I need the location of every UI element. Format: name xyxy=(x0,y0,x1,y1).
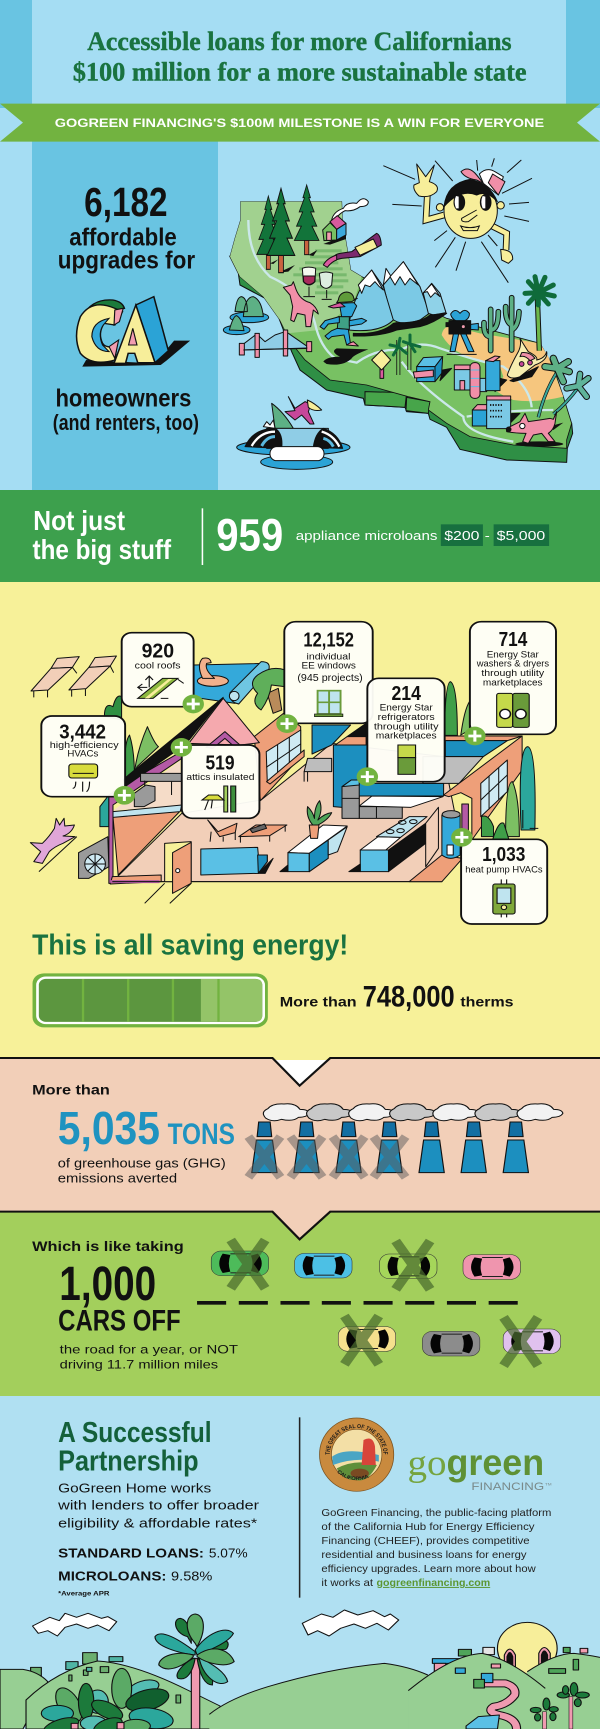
icon: cacti xyxy=(484,298,519,351)
illustration: California map xyxy=(223,158,588,469)
icon: storefront xyxy=(413,357,452,382)
roads xyxy=(248,220,553,442)
heading: the big stuff xyxy=(33,535,172,566)
icon: pink horse xyxy=(283,282,318,327)
stat: 959 appliance microloans: 959 xyxy=(216,511,283,561)
text: about GoGreen: gogreenfinancing.com xyxy=(377,1578,490,1589)
panel: greenhouse gas averted xyxy=(0,1058,600,1213)
text: about GoGreen: Financing (CHEEF), provides competitive xyxy=(321,1536,530,1547)
small palms xyxy=(530,1683,589,1729)
winding road xyxy=(484,1683,517,1729)
card: cool roofs xyxy=(122,633,194,707)
progress bar xyxy=(33,973,268,1027)
left palms xyxy=(41,1668,175,1729)
icon: pool with inflatable xyxy=(194,658,269,704)
icon row: cars xyxy=(211,1240,561,1366)
mountains xyxy=(348,262,447,336)
icon: road sign and small palms xyxy=(372,335,420,378)
icon: state seal: THE GREAT SEAL OF THE STATE OF xyxy=(325,1424,388,1454)
card: high-efficiency HVACs: 3,442 xyxy=(59,720,106,743)
icon: film camera xyxy=(446,310,478,354)
text: about GoGreen: of the California Hub for Energy Efficiency xyxy=(321,1522,535,1533)
heading xyxy=(58,1416,212,1477)
stat: 6,182 affordable upgrades: homeowners xyxy=(55,384,191,412)
title: Accessible loans for more Californians xyxy=(87,28,512,57)
text: 5,035 tons: 5,035 xyxy=(58,1102,160,1154)
stat: 6,182 affordable upgrades xyxy=(53,180,199,436)
card: EE windows: 12,152 xyxy=(303,628,354,651)
icon: surfer and wave xyxy=(237,397,350,469)
stat: 748,000 therms: therms xyxy=(460,995,514,1010)
illustration: hills and palms xyxy=(0,1610,600,1729)
text: 5,035 tons: TONS xyxy=(168,1117,235,1151)
illustration: house cutaway xyxy=(30,656,538,903)
stat: 748,000 therms xyxy=(280,980,514,1013)
text: 1,000 cars off: Which is like taking xyxy=(32,1239,184,1255)
card: refrigerators: through utility xyxy=(374,722,439,732)
card: refrigerators: marketplaces xyxy=(376,731,437,741)
plus markers xyxy=(114,695,486,847)
text: lender description: eligibility & affordable rates* xyxy=(58,1516,258,1531)
stat: 959 appliance microloans: - xyxy=(485,528,490,543)
icon: beach palms xyxy=(538,358,588,417)
icon: clouds xyxy=(33,1610,399,1636)
heading xyxy=(33,506,203,566)
islands xyxy=(223,297,269,335)
stat: 959 appliance microloans: $200 xyxy=(444,528,480,543)
text: lender description: GoGreen Home works xyxy=(58,1481,211,1496)
logo: GoGreen Financing: FINANCING xyxy=(471,1480,544,1493)
card: EE windows: individual xyxy=(307,652,351,662)
big palm xyxy=(155,1614,234,1729)
icon: pink bear xyxy=(506,412,563,447)
card: refrigerators: Energy Star xyxy=(380,703,434,713)
card: washers and dryers: 714 xyxy=(499,627,528,651)
text: 5,035 tons: emissions averted xyxy=(58,1172,177,1185)
text: about GoGreen xyxy=(321,1508,551,1589)
panel: cars off the road xyxy=(0,1212,600,1396)
ribbon banner: GOGREEN FINANCING'S $100M MILESTONE IS A WIN FOR EVERYONE xyxy=(55,116,544,130)
card: high-efficiency HVACs: high-efficiency xyxy=(50,741,119,751)
text: 1,000 cars off: CARS OFF xyxy=(58,1304,181,1337)
logo: GoGreen Financing xyxy=(408,1442,552,1493)
icon: CA block letters xyxy=(77,297,190,367)
stat: 959 appliance microloans: appliance microloans xyxy=(296,528,437,543)
icon: water heater xyxy=(442,811,460,858)
text: loan rates: 5.07% xyxy=(209,1547,248,1561)
shadows xyxy=(270,235,346,273)
icon: trees xyxy=(100,668,469,827)
text: about GoGreen: GoGreen Financing, the public-facing platform xyxy=(321,1508,551,1519)
heading: Partnership xyxy=(58,1445,199,1477)
stat: 6,182 affordable upgrades: upgrades for xyxy=(58,246,195,274)
icon: state seal xyxy=(319,1418,394,1492)
text: 1,000 cars off xyxy=(32,1239,238,1371)
vineyard rows xyxy=(293,249,348,294)
card: high-efficiency HVACs: HVACs xyxy=(67,749,98,759)
icon: tall palm xyxy=(525,277,554,351)
text: lender description xyxy=(57,1481,259,1531)
icon: city buildings xyxy=(454,356,520,429)
ribbon banner xyxy=(0,104,600,142)
logo: GoGreen Financing: green xyxy=(447,1442,544,1483)
icon: wine bottle and glasses xyxy=(302,233,381,299)
card: refrigerators: 214 xyxy=(391,681,421,705)
text: 1,000 cars off: 1,000 xyxy=(59,1257,156,1311)
card: high-efficiency HVACs xyxy=(41,716,125,797)
title: $100 million for a more sustainable state xyxy=(73,58,527,87)
card: washers and dryers: Energy Star xyxy=(487,650,540,660)
card: heat pump HVACs: heat pump HVACs xyxy=(465,865,543,875)
text: about GoGreen: efficiency upgrades. Learn more about how xyxy=(321,1564,536,1575)
stat: 959 appliance microloans: $5,000 xyxy=(497,528,546,543)
text: loan rates xyxy=(58,1547,248,1598)
card: heat pump HVACs xyxy=(461,839,547,924)
stat: 959 appliance microloans xyxy=(216,511,549,561)
card: attics insulated: 519 xyxy=(205,751,235,774)
panel: home upgrades and energy saved xyxy=(0,582,600,1060)
icon: loungers xyxy=(31,656,116,697)
text: 5,035 tons: More than xyxy=(32,1082,110,1098)
text: 1,000 cars off: driving 11.7 million miles xyxy=(60,1358,219,1371)
text: loan rates: *Average APR xyxy=(58,1590,110,1598)
text: loan rates: STANDARD LOANS: xyxy=(58,1547,204,1561)
title xyxy=(73,28,527,87)
text: about GoGreen: it works at xyxy=(321,1578,373,1589)
text: about GoGreen: residential and business loans for energy xyxy=(321,1550,527,1561)
card: washers and dryers xyxy=(470,622,556,734)
text: lender description: with lenders to offer broader xyxy=(57,1499,259,1513)
card: EE windows: EE windows xyxy=(302,661,356,671)
card: EE windows: (945 projects) xyxy=(297,674,363,684)
panel: header and state map xyxy=(0,0,600,492)
text: loan rates: 9.58% xyxy=(171,1569,213,1584)
card: attics insulated xyxy=(182,745,259,818)
heading: A Successful xyxy=(58,1416,212,1449)
logo: GoGreen Financing: TM xyxy=(545,1482,552,1486)
text: 1,000 cars off: the road for a year, or NOT xyxy=(60,1342,238,1356)
icon: cabin with smoke xyxy=(323,199,368,241)
stat: 748,000 therms: More than xyxy=(280,995,357,1010)
stat: 748,000 therms: 748,000 xyxy=(363,980,455,1013)
card: refrigerators xyxy=(367,678,445,782)
icon: jumping dog xyxy=(30,818,77,872)
card: attics insulated: attics insulated xyxy=(186,773,254,783)
icon: door xyxy=(145,842,191,903)
logo: GoGreen Financing: go xyxy=(408,1442,447,1483)
card: EE windows xyxy=(284,622,373,723)
text: loan rates: MICROLOANS: xyxy=(58,1569,166,1584)
card: washers and dryers: marketplaces xyxy=(483,678,543,688)
heading: this is all saving energy: This is all saving energy! xyxy=(32,928,348,961)
card: cool roofs: cool roofs xyxy=(135,661,181,671)
card: cool roofs: 920 xyxy=(142,639,174,662)
card: heat pump HVACs: 1,033 xyxy=(482,842,525,866)
card: washers and dryers: washers & dryers xyxy=(476,659,549,669)
road divider xyxy=(197,1301,518,1305)
roof xyxy=(123,697,259,807)
houses on hills xyxy=(69,1659,579,1703)
stat: 6,182 affordable upgrades: (and renters, too) xyxy=(53,411,199,436)
icon row: smokestacks xyxy=(248,1104,563,1177)
icon: outdoor HVAC unit xyxy=(79,837,109,878)
heading: Not just xyxy=(33,506,125,537)
text: 5,035 tons: of greenhouse gas (GHG) xyxy=(58,1156,226,1170)
stat: 6,182 affordable upgrades: 6,182 xyxy=(84,180,168,225)
card: washers and dryers: through utility xyxy=(481,669,544,679)
floor and walls xyxy=(109,713,538,884)
icon: kitchen xyxy=(280,780,443,872)
stat: 6,182 affordable upgrades: affordable xyxy=(69,223,177,251)
panel: a successful partnership xyxy=(0,1396,600,1729)
icon: smiling sun xyxy=(383,158,532,283)
icon: state seal: CALIFORNIA xyxy=(338,1470,369,1480)
panel: not just the big stuff xyxy=(0,490,600,582)
card: refrigerators: refrigerators xyxy=(378,713,435,723)
text: 5,035 tons xyxy=(32,1082,235,1185)
icon: hiker xyxy=(320,292,368,365)
icon: Golden Gate bridge xyxy=(239,330,312,357)
icon: living room furniture xyxy=(201,820,287,875)
icon: cow skull xyxy=(507,338,547,382)
